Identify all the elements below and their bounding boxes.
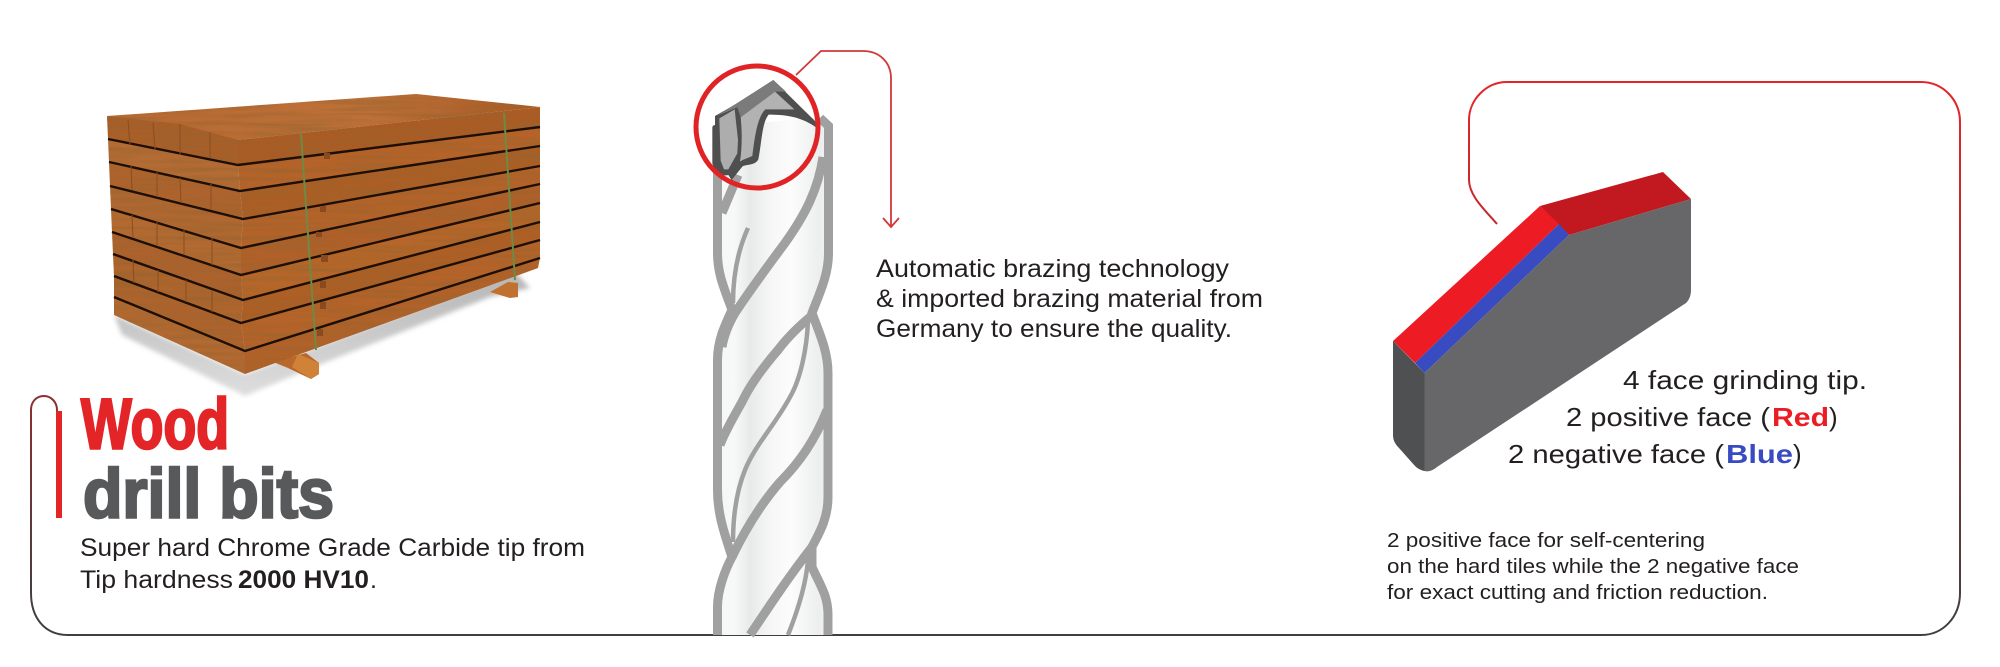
title: Wood drill bits bbox=[56, 386, 334, 532]
text: face labels: ) bbox=[1793, 439, 1802, 469]
text: brazing description: Automatic brazing technology bbox=[876, 255, 1230, 283]
carbide tip bbox=[712, 80, 817, 180]
text: face function description: 2 positive face for self-centering bbox=[1387, 530, 1705, 552]
red highlight circle bbox=[696, 66, 818, 188]
title line: Wood: Wood bbox=[81, 386, 229, 464]
text: carbide tip description: Tip hardness bbox=[80, 566, 233, 594]
tip dark silhouette bbox=[712, 80, 817, 180]
tip positive face (red) bbox=[1393, 206, 1559, 363]
panel frame: rounded outline with red top callout bbox=[31, 82, 1960, 635]
text: face function description: for exact cutting and friction reduction. bbox=[1387, 582, 1768, 604]
tip main body bbox=[1424, 199, 1691, 471]
text: face labels: 4 face grinding tip. bbox=[1623, 365, 1867, 395]
tip top bevel bbox=[717, 80, 786, 117]
illustration: four-face grinding tip bbox=[1393, 172, 1691, 471]
illustration: drill bit bbox=[696, 66, 829, 635]
arrow: callout from tip to brazing text bbox=[796, 51, 899, 227]
text: face function description bbox=[1387, 530, 1799, 604]
title accent bar bbox=[56, 411, 62, 518]
timber boards bbox=[107, 94, 540, 374]
timber binding straps bbox=[301, 113, 515, 350]
text: carbide tip description: . bbox=[370, 566, 377, 594]
title line: drill bits: drill bits bbox=[83, 454, 334, 532]
text: face labels: ) bbox=[1829, 402, 1838, 432]
tip light faces bbox=[740, 92, 794, 162]
text: brazing description: Germany to ensure the quality. bbox=[876, 315, 1232, 343]
text: face labels: Blue bbox=[1726, 439, 1793, 469]
text: face function description: on the hard tiles while the 2 negative face bbox=[1387, 556, 1799, 578]
timber gaps between boards bbox=[108, 127, 540, 351]
drill body bbox=[717, 117, 829, 635]
text: brazing description bbox=[876, 255, 1263, 343]
tip negative face (blue) bbox=[1415, 224, 1569, 373]
text: face labels: Red bbox=[1772, 402, 1829, 432]
text: carbide tip description bbox=[80, 534, 585, 594]
text: carbide tip description: 2000 HV10 bbox=[238, 566, 369, 594]
timber knots bbox=[316, 153, 330, 336]
timber supports bbox=[273, 282, 518, 379]
text: face labels: 2 positive face ( bbox=[1566, 402, 1770, 432]
image: stacked timber bbox=[107, 94, 540, 396]
text: brazing description: & imported brazing material from bbox=[876, 285, 1263, 313]
drill outline and flutes bbox=[718, 118, 828, 635]
tip rear positive face bbox=[1540, 172, 1691, 235]
timber board end joints bbox=[128, 120, 212, 312]
tip side face bbox=[1393, 341, 1424, 471]
timber ground shadow bbox=[114, 272, 530, 396]
text: face labels bbox=[1508, 365, 1867, 469]
text: face labels: 2 negative face ( bbox=[1508, 439, 1724, 469]
text: carbide tip description: Super hard Chrome Grade Carbide tip from bbox=[80, 534, 585, 562]
